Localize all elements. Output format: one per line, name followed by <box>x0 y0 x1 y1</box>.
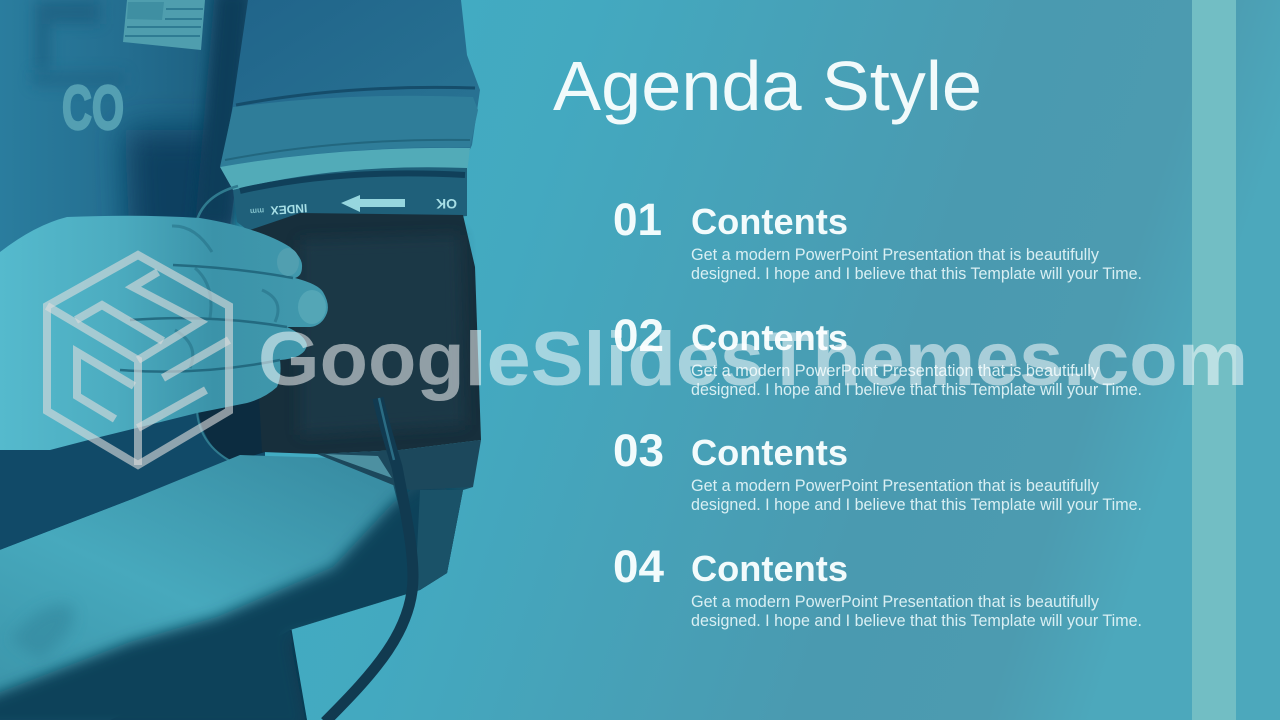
cuff band with arrow <box>233 167 467 232</box>
description 04: Get a modern PowerPoint Presentation that is beautifully <box>691 593 1100 611</box>
description 02: Get a modern PowerPoint Presentation that is beautifully <box>691 362 1100 380</box>
description 01: Get a modern PowerPoint Presentation that is beautifully <box>691 246 1100 264</box>
number 01: 01 <box>613 194 662 245</box>
decorative vertical strip <box>1192 0 1236 720</box>
agenda item 03 <box>613 425 1142 514</box>
description 03: Get a modern PowerPoint Presentation that is beautifully <box>691 477 1100 495</box>
cuff OK label: OK <box>436 196 457 212</box>
agenda item 02 <box>613 310 1142 399</box>
cuff small label: mm <box>250 206 264 216</box>
shirt torso <box>0 0 250 300</box>
description 02: designed. I hope and I believe that this Template will your Time. <box>691 381 1142 399</box>
tube loop behind hand <box>197 395 265 462</box>
sleeve cuff ribbing <box>220 96 478 167</box>
number 03: 03 <box>613 425 664 476</box>
heading 02: Contents <box>691 317 848 358</box>
lower torso <box>0 600 307 720</box>
heading 03: Contents <box>691 432 848 473</box>
watermark logo: hexagonal cube <box>47 255 229 465</box>
cuff lower band <box>317 440 481 490</box>
watermark text: GoogleSlidesThemes.com <box>258 317 1248 402</box>
heading 01: Contents <box>691 201 848 242</box>
number 02: 02 <box>613 310 664 361</box>
number 04: 04 <box>613 541 664 592</box>
shirt flag patch <box>123 0 205 50</box>
skin strip under sleeve <box>220 148 470 190</box>
velcro cuff <box>250 213 481 454</box>
photo: arm with blood pressure cuff <box>0 0 481 720</box>
dark torso under hand <box>0 400 265 550</box>
pressure tube <box>325 398 413 720</box>
cuff arrow <box>341 195 405 212</box>
elbow dark region <box>270 455 473 630</box>
sleeve <box>221 0 480 168</box>
description 03: designed. I hope and I believe that this Template will your Time. <box>691 496 1142 514</box>
cuff label text: INDEX <box>270 201 308 218</box>
hand and fingers <box>0 216 328 450</box>
forearm shadow <box>0 480 470 720</box>
description 01: designed. I hope and I believe that this Template will your Time. <box>691 265 1142 283</box>
title: Agenda Style <box>553 47 982 125</box>
heading 04: Contents <box>691 548 848 589</box>
shirt letters CO: CO <box>62 74 124 143</box>
forearm <box>0 455 420 720</box>
agenda item 04 <box>613 541 1142 630</box>
description 04: designed. I hope and I believe that this Template will your Time. <box>691 612 1142 630</box>
agenda item 01 <box>613 194 1142 283</box>
